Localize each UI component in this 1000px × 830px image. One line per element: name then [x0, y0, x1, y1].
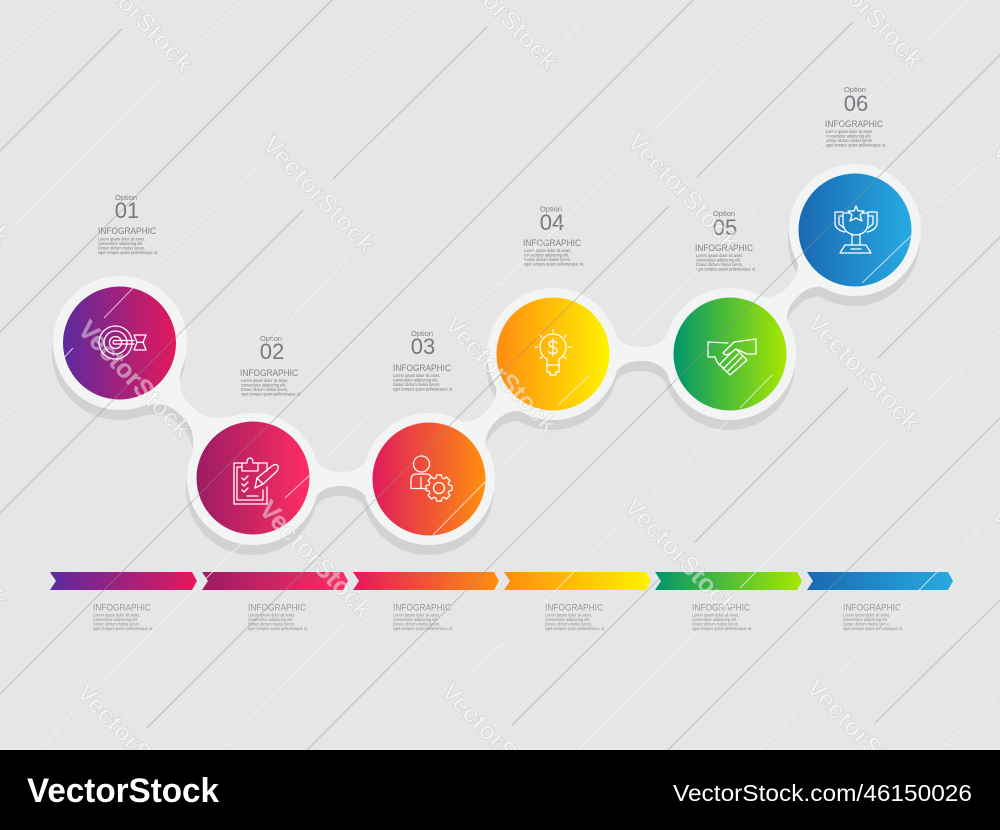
arrow caption 3 — [393, 602, 453, 631]
option 03 text: Donec dictum metus lorem, — [393, 382, 440, 387]
icon: person with gear — [411, 456, 452, 501]
option 06 text: eget tempus quam pellentesque ut. — [826, 142, 886, 148]
arrow caption 3: Lorem ipsum dolor sit amet, — [393, 612, 440, 618]
option 02 text: Donec dictum metus lorem, — [241, 387, 288, 392]
option 01 text: consectetur adipiscing elit. — [98, 241, 143, 246]
option 02 text: INFOGRAPHIC — [240, 368, 298, 379]
option 05 text: Option — [713, 209, 735, 218]
watermarks: VectorStock — [70, 677, 196, 807]
arrow caption 4: Lorem ipsum dolor sit amet, — [545, 612, 592, 618]
option 04 text: eget tempus quam pellentesque ut. — [524, 262, 584, 266]
option 01 text: 01 — [115, 198, 139, 223]
arrow 5 — [655, 572, 802, 590]
option 02 text: consectetur adipiscing elit. — [241, 382, 286, 388]
arrow caption 5 — [692, 602, 752, 631]
option 06 text: Option — [844, 85, 866, 94]
option 01 text — [98, 193, 158, 255]
option 04 text: Donec dictum metus lorem, — [524, 257, 571, 262]
arrow caption 1: eget tempus quam pellentesque ut. — [93, 626, 153, 631]
option 02 text: Lorem ipsum dolor sit amet, — [241, 378, 288, 383]
option 04 text: INFOGRAPHIC — [523, 238, 581, 249]
footer bar — [0, 750, 1000, 830]
arrow caption 5: Lorem ipsum dolor sit amet, — [692, 612, 739, 618]
option 05 text: INFOGRAPHIC — [695, 243, 753, 254]
option 05 text: eget tempus quam pellentesque ut. — [696, 266, 756, 272]
icon: trophy — [835, 206, 877, 253]
option 04 text: Lorem ipsum dolor sit amet, — [524, 248, 571, 253]
option 05 text — [695, 209, 756, 272]
option 01 text: Option — [115, 193, 137, 202]
arrow caption 6: Lorem ipsum dolor sit amet, — [843, 612, 890, 618]
arrow caption 2: eget tempus quam pellentesque ut. — [248, 626, 308, 631]
footer brand: VectorStock — [27, 772, 219, 810]
arrow caption 2: consectetur adipiscing elit. — [248, 617, 293, 622]
arrow caption 5: eget tempus quam pellentesque ut. — [692, 626, 752, 631]
arrow caption 6: INFOGRAPHIC — [843, 602, 901, 614]
circle 3 with person and gear icon — [372, 422, 486, 536]
watermarks: VectorStock — [435, 676, 561, 806]
arrow 4 — [504, 572, 651, 590]
option 03 text: consectetur adipiscing elit. — [393, 378, 438, 382]
footer url: VectorStock.com/46150026 — [673, 780, 972, 806]
option 04 text — [523, 204, 584, 266]
option 01 text: Lorem ipsum dolor sit amet, — [98, 236, 145, 242]
arrow caption 1: consectetur adipiscing elit. — [93, 617, 138, 622]
arrow caption 1: Lorem ipsum dolor sit amet, — [93, 612, 140, 618]
arrow caption 2: INFOGRAPHIC — [248, 602, 306, 614]
option 01 text: INFOGRAPHIC — [98, 226, 156, 237]
icon: target with arrow — [99, 326, 146, 359]
circle 2 with clipboard icon — [196, 422, 310, 534]
watermarks: VectorStock — [72, 314, 198, 444]
watermarks: VectorStock — [801, 307, 927, 437]
arrow caption 3: consectetur adipiscing elit. — [393, 617, 438, 622]
watermarks: VectorStock — [438, 309, 564, 439]
arrow caption 5: INFOGRAPHIC — [692, 602, 750, 614]
option 03 text: INFOGRAPHIC — [393, 363, 451, 374]
arrow caption 5: consectetur adipiscing elit. — [692, 617, 737, 622]
option 01 text: eget tempus quam pellentesque ut. — [98, 250, 158, 255]
watermarks: VectorStock — [253, 494, 379, 624]
option 02 text: Option — [260, 334, 282, 343]
option 04 text: Option — [540, 204, 562, 214]
arrow 2 — [202, 572, 348, 590]
arrow caption 2 — [248, 602, 308, 631]
icon: dollar light bulb — [535, 330, 571, 375]
arrow 3 — [353, 572, 499, 590]
arrow caption 4 — [545, 602, 605, 631]
option 03 text: Lorem ipsum dolor sit amet, — [393, 373, 440, 378]
circle 5 with handshake icon — [674, 298, 786, 410]
watermarks: VectorStock — [256, 129, 382, 259]
watermarks: VectorStock — [800, 672, 926, 802]
circle 6 with trophy icon — [798, 174, 912, 286]
option 06 text — [825, 85, 886, 148]
arrow caption 4: eget tempus quam pellentesque ut. — [545, 626, 605, 631]
arrow caption 1 — [93, 602, 153, 631]
icon: clipboard checklist with pen — [234, 458, 278, 504]
arrow caption 4: INFOGRAPHIC — [545, 602, 603, 614]
option 06 text: 06 — [844, 91, 868, 116]
arrow caption 6: eget tempus quam pellentesque ut. — [843, 626, 903, 631]
option 05 text: 05 — [713, 215, 737, 240]
arrow caption 4: Donec dictum metus lorem, — [545, 622, 592, 626]
option 02 text — [240, 334, 301, 396]
arrow 6 — [807, 572, 953, 590]
option 06 text: Lorem ipsum dolor sit amet, — [826, 129, 873, 134]
watermarks: VectorStock — [621, 126, 747, 256]
arrow band — [50, 572, 953, 590]
arrow caption 5: Donec dictum metus lorem, — [692, 622, 739, 626]
arrow caption 1: INFOGRAPHIC — [93, 602, 151, 614]
arrow caption 2: Donec dictum metus lorem, — [248, 622, 295, 626]
arrow caption 3: INFOGRAPHIC — [393, 602, 451, 614]
option 04 text: 04 — [540, 210, 564, 235]
arrow caption 6: consectetur adipiscing elit. — [843, 617, 888, 622]
option 03 text — [393, 329, 453, 392]
arrow caption 3: Donec dictum metus lorem, — [393, 622, 440, 626]
option 01 text: Donec dictum metus lorem, — [98, 246, 145, 250]
option 02 text: 02 — [260, 339, 284, 364]
icon: handshake — [708, 339, 756, 375]
timeline white connector band — [53, 164, 921, 545]
timeline shadow — [52, 174, 920, 555]
option 02 text: eget tempus quam pellentesque ut. — [241, 392, 301, 396]
option 05 text: Donec dictum metus lorem, — [696, 262, 743, 267]
arrow caption 2: Lorem ipsum dolor sit amet, — [248, 612, 295, 618]
option 04 text: consectetur adipiscing elit. — [524, 252, 569, 258]
option 05 text: Lorem ipsum dolor sit amet, — [696, 253, 743, 258]
option 05 text: consectetur adipiscing elit. — [696, 258, 741, 262]
arrow caption 6: Donec dictum metus lorem, — [843, 622, 890, 626]
circle 4 with light bulb icon — [496, 298, 610, 410]
arrow caption 6 — [843, 602, 903, 631]
circle 1 with target icon — [63, 286, 176, 400]
option 03 text: Option — [411, 329, 433, 338]
arrow 1 — [50, 572, 197, 590]
arrow caption 3: eget tempus quam pellentesque ut. — [393, 626, 453, 631]
arrow caption 1: Donec dictum metus lorem, — [93, 622, 140, 626]
option 03 text: eget tempus quam pellentesque ut. — [393, 386, 453, 392]
option 06 text: INFOGRAPHIC — [825, 119, 883, 130]
option 06 text: Donec dictum metus lorem, — [826, 138, 873, 143]
option 06 text: consectetur adipiscing elit. — [826, 134, 871, 138]
watermarks: VectorStock — [618, 491, 744, 621]
arrow caption 4: consectetur adipiscing elit. — [545, 617, 590, 622]
option 03 text: 03 — [411, 334, 435, 359]
